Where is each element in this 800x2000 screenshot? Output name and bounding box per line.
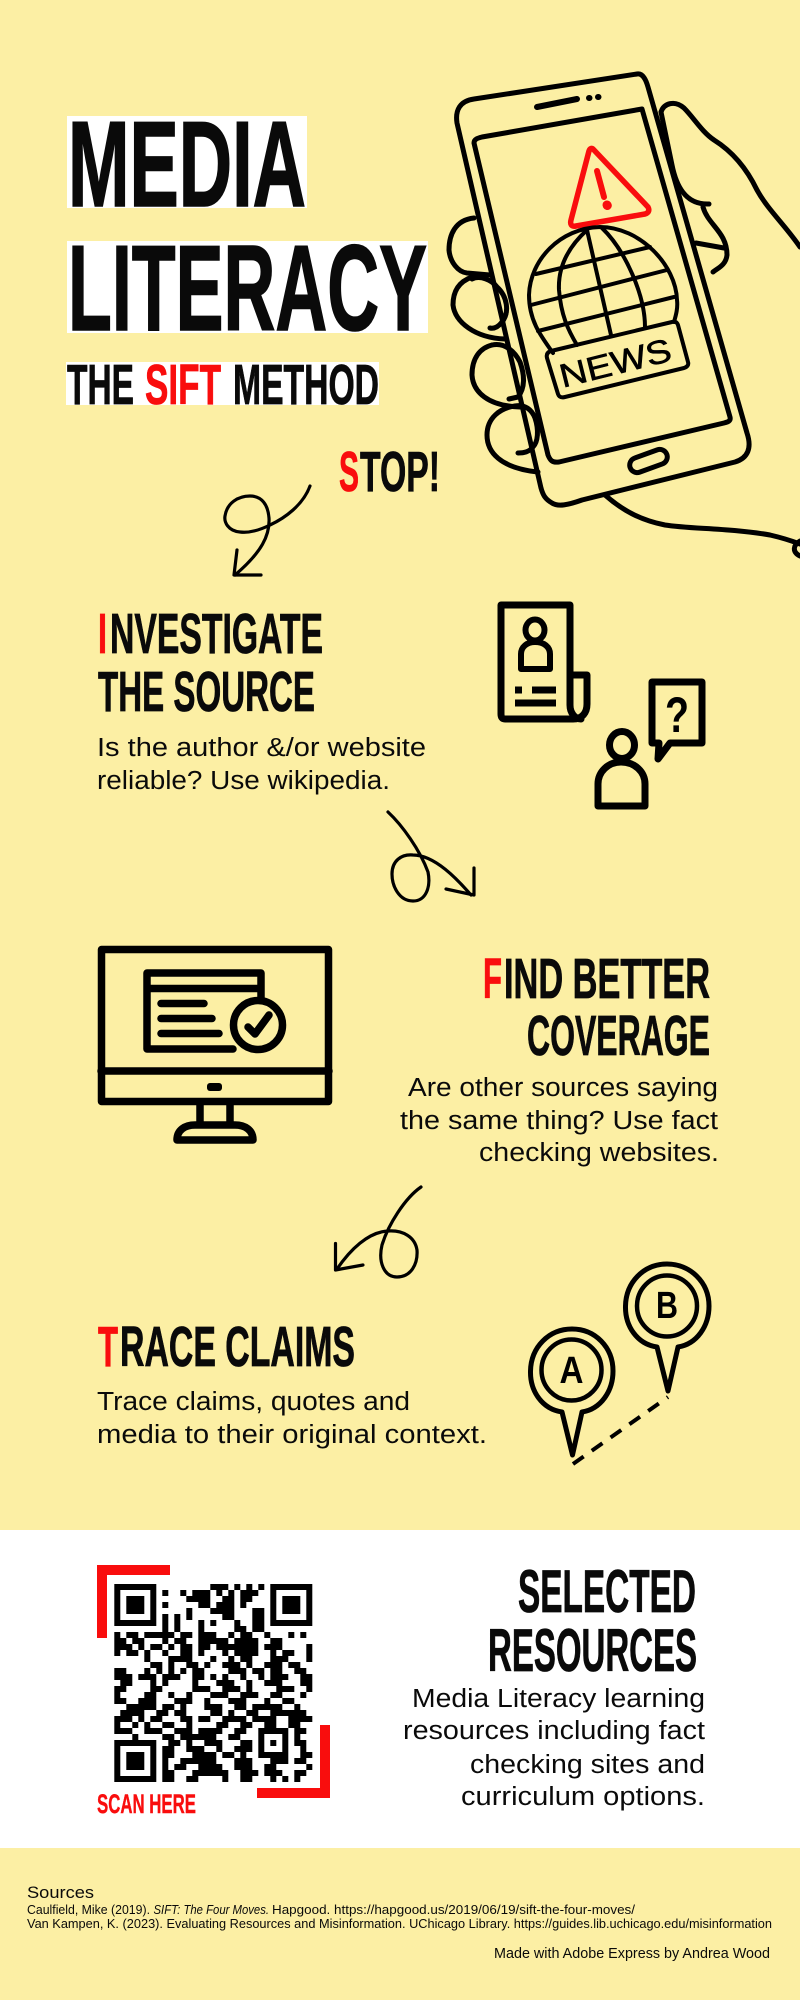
scan here label: SCAN HERE [97, 1789, 196, 1819]
text block: sources: Caulfield, Mike (2019). [27, 1903, 150, 1917]
text block: resources description: curriculum options. [461, 1783, 705, 1811]
arrow: stop to investigate [225, 486, 310, 575]
icon: hand holding phone with news alert [449, 74, 800, 556]
arrow: investigate to find better coverage [388, 812, 474, 901]
heading: selected resources [488, 1558, 697, 1684]
text block: find better coverage description: Are other sources saying [408, 1074, 718, 1102]
heading: trace claims: T [98, 1315, 118, 1379]
panel: selected resources [0, 1530, 800, 1848]
text block: sources: Van Kampen, K. (2023). Evaluating Resources and Misinformation. UChicago Library. https://guides.lib.uchicago.edu/misinformation [27, 1917, 772, 1931]
icon: map pins A and B with dashed route [530, 1264, 709, 1464]
QR code [114, 1584, 312, 1782]
text block: sources: Sources [27, 1883, 94, 1902]
icon: newspaper with person profile [501, 605, 587, 719]
text block: sources: Hapgood. https://hapgood.us/2019/06/19/sift-the-four-moves/ [272, 1903, 636, 1917]
hand outline [449, 103, 800, 556]
text block: investigate description: reliable? Use wikipedia. [97, 767, 390, 795]
icon: computer monitor with verified page [101, 950, 329, 1140]
panel: trace claims [97, 1315, 487, 1449]
title: Media Literacy, The SIFT Method: LITERACY [68, 220, 427, 356]
text block: sources: SIFT: The Four Moves. [154, 1903, 269, 1917]
panel: investigate the source [97, 602, 426, 795]
title: Media Literacy, The SIFT Method: MEDIA [68, 96, 306, 232]
text block: resources description: resources including fact [403, 1717, 705, 1745]
icon: map pins A and B with dashed route: B [656, 1285, 678, 1327]
news banner [547, 322, 688, 397]
text block: trace claims description: media to their original context. [97, 1421, 487, 1449]
QR code with red brackets [97, 1565, 330, 1819]
text block: investigate description: Is the author &/or website [97, 734, 426, 762]
heading: investigate the source: THE SOURCE [98, 660, 315, 724]
icon: red warning triangle [571, 148, 649, 226]
heading: find better coverage: F [483, 947, 502, 1011]
text block: find better coverage description [400, 1074, 719, 1167]
text block: trace claims description [97, 1388, 487, 1449]
text block: find better coverage description: checking websites. [479, 1139, 719, 1167]
text block: sources [27, 1883, 772, 1931]
heading: trace claims [98, 1315, 355, 1379]
heading: find better coverage [483, 947, 710, 1068]
panel: find better coverage [400, 947, 719, 1167]
text block: resources description: checking sites and [470, 1751, 705, 1779]
icon: globe [529, 227, 677, 353]
title: Media Literacy, The SIFT Method: THE [67, 353, 134, 417]
heading: Stop: S [339, 440, 359, 504]
red corner brackets [97, 1565, 330, 1798]
text block: trace claims description: Trace claims, quotes and [97, 1388, 410, 1416]
heading: investigate the source [98, 602, 323, 724]
title: Media Literacy, The SIFT Method [66, 96, 428, 417]
heading: investigate the source: NVESTIGATE [110, 602, 323, 666]
arrow: find better coverage to trace claims [336, 1187, 421, 1277]
heading: Stop [339, 440, 440, 504]
text block: resources description: Media Literacy learning [412, 1685, 705, 1713]
heading: trace claims: RACE CLAIMS [120, 1315, 355, 1379]
icon: map pins A and B with dashed route: A [560, 1350, 584, 1392]
text block: find better coverage description: the same thing? Use fact [400, 1107, 718, 1135]
icon: person asking a question [598, 682, 702, 806]
phone body [457, 74, 749, 505]
text block: resources description [403, 1685, 705, 1811]
news banner: NEWS [555, 331, 675, 395]
title: Media Literacy, The SIFT Method: METHOD [233, 353, 379, 417]
credit: made with Adobe Express: Made with Adobe Express by Andrea Wood [494, 1946, 770, 1962]
icon: person asking a question: ? [665, 687, 689, 743]
heading: investigate the source: I [98, 602, 107, 666]
text block: investigate description [97, 734, 426, 795]
title: Media Literacy, The SIFT Method: SIFT [145, 353, 221, 417]
heading: Stop: TOP! [360, 440, 440, 504]
